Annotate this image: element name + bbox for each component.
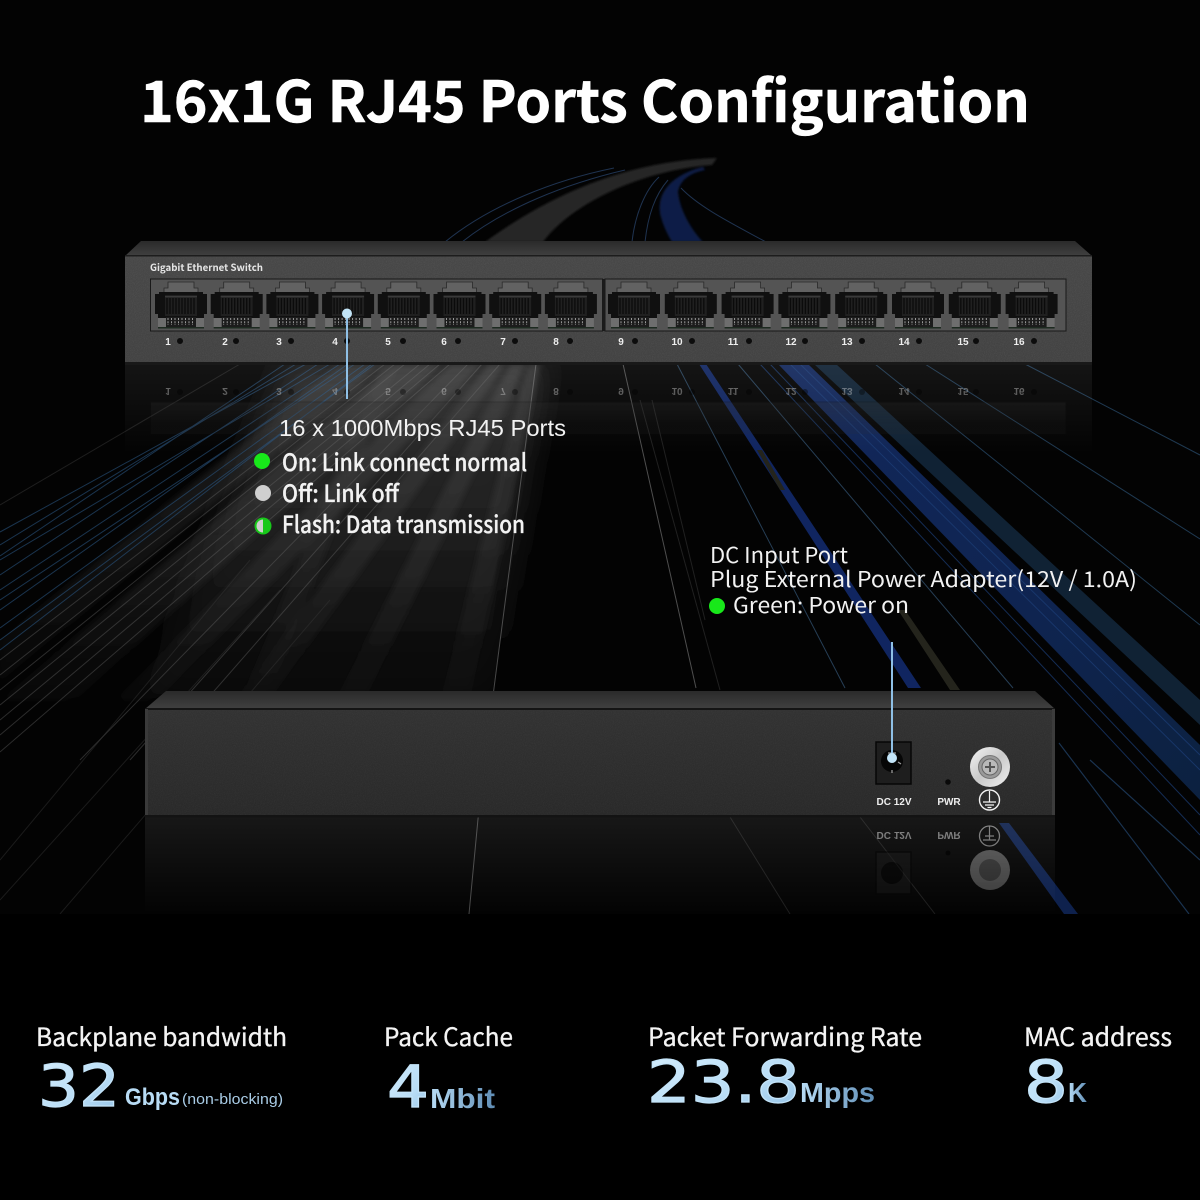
- background: light trail highway: [0, 156, 1200, 914]
- port numbers: 7: [500, 337, 506, 348]
- reflection: front switch: [125, 365, 1092, 434]
- value: 4: [387, 1053, 429, 1121]
- spec: packet forwarding rate: [647, 1018, 922, 1116]
- legend: flash: Flash: Data transmission: [282, 505, 525, 540]
- reflection: rear switch: PWR: [937, 829, 961, 840]
- reflection: front switch: 8: [553, 385, 559, 396]
- reflection: front switch: 4: [332, 385, 338, 396]
- value: 23.8: [647, 1048, 800, 1116]
- port numbers: [165, 337, 1025, 348]
- rear face: [145, 709, 1055, 817]
- RJ45 ports 1-16: [155, 282, 1058, 328]
- reflection: front switch: 2: [222, 385, 228, 396]
- PWR LED: [945, 779, 951, 785]
- port numbers: 16: [1013, 337, 1025, 348]
- DC power legend: Green: Power on: [733, 588, 909, 620]
- reflection: front switch: 5: [385, 385, 391, 396]
- front switch: [125, 241, 1092, 365]
- ground symbol: [980, 790, 1000, 810]
- port numbers: 4: [332, 337, 338, 348]
- port numbers: 12: [785, 337, 797, 348]
- port numbers: 1: [165, 337, 171, 348]
- callout: RJ45 ports text: [254, 415, 566, 540]
- reflection: front switch: 10: [671, 385, 683, 396]
- rear switch: [145, 691, 1055, 818]
- label: MAC address: [1024, 1018, 1172, 1054]
- reflection: front switch: 1: [165, 385, 171, 396]
- port numbers: 3: [276, 337, 282, 348]
- unit: Mbit: [430, 1083, 495, 1114]
- port numbers: 8: [553, 337, 559, 348]
- port status LEDs: [177, 338, 1037, 344]
- reflection: front switch: 16: [1013, 385, 1025, 396]
- callout line: RJ45 ports: [342, 308, 352, 399]
- callout heading: 16 x 1000Mbps RJ45 Ports: [279, 415, 566, 441]
- DC 12V label: DC 12V: [876, 797, 912, 808]
- reflection: front switch: 7: [500, 385, 506, 396]
- DC heading: DC Input Port: [710, 538, 848, 570]
- port numbers: 2: [222, 337, 228, 348]
- product label: Gigabit Ethernet Switch: [150, 259, 263, 274]
- PWR label: PWR: [937, 797, 961, 808]
- unit: Gbps: [125, 1084, 180, 1111]
- port numbers: 6: [441, 337, 447, 348]
- spec: backplane bandwidth: [36, 1018, 287, 1120]
- switch front face: [125, 256, 1092, 364]
- value: 32: [38, 1052, 120, 1120]
- qualifier: (non-blocking): [182, 1091, 283, 1108]
- reflection: front switch: 12: [785, 385, 797, 396]
- port bay: [150, 279, 1066, 331]
- legend: off: Off: Link off: [282, 474, 401, 509]
- grounding screw: [970, 747, 1010, 787]
- legend: on: On: Link connect normal: [282, 443, 527, 478]
- spec: pack cache: [384, 1018, 513, 1121]
- label: Pack Cache: [384, 1018, 513, 1054]
- bottom spec band: [0, 914, 1200, 1200]
- port numbers: 15: [957, 337, 969, 348]
- label: Packet Forwarding Rate: [648, 1018, 922, 1054]
- title: 16x1G RJ45 Ports Configuration: [140, 57, 1030, 139]
- reflection: front switch: 11: [728, 385, 739, 396]
- label: Backplane bandwidth: [36, 1018, 287, 1054]
- spec: MAC address: [1024, 1018, 1172, 1116]
- reflection: front switch: 6: [441, 385, 447, 396]
- port numbers: 11: [728, 337, 739, 348]
- reflection: front switch: 14: [898, 385, 910, 396]
- port numbers: 9: [618, 337, 624, 348]
- rear top face: [145, 691, 1055, 709]
- reflection: front switch: 13: [841, 385, 853, 396]
- DC description: Plug External Power Adapter(12V / 1.0A): [710, 562, 1137, 594]
- reflection: front switch: 9: [618, 385, 624, 396]
- value: 8: [1024, 1048, 1068, 1116]
- switch top face: [125, 241, 1092, 256]
- port numbers: 14: [898, 337, 910, 348]
- reflection: rear switch: DC 12V: [876, 829, 912, 840]
- DC jack: [876, 742, 911, 784]
- reflection: front switch: 15: [957, 385, 969, 396]
- reflection: front switch: 3: [276, 385, 282, 396]
- callout line: DC input: [887, 642, 897, 763]
- port numbers: 13: [841, 337, 853, 348]
- reflection: rear switch: [145, 818, 1055, 893]
- callout: DC input port text: [709, 538, 1137, 620]
- port numbers: 5: [385, 337, 391, 348]
- port numbers: 10: [671, 337, 683, 348]
- unit: Mpps: [800, 1077, 875, 1108]
- unit: K: [1068, 1077, 1087, 1108]
